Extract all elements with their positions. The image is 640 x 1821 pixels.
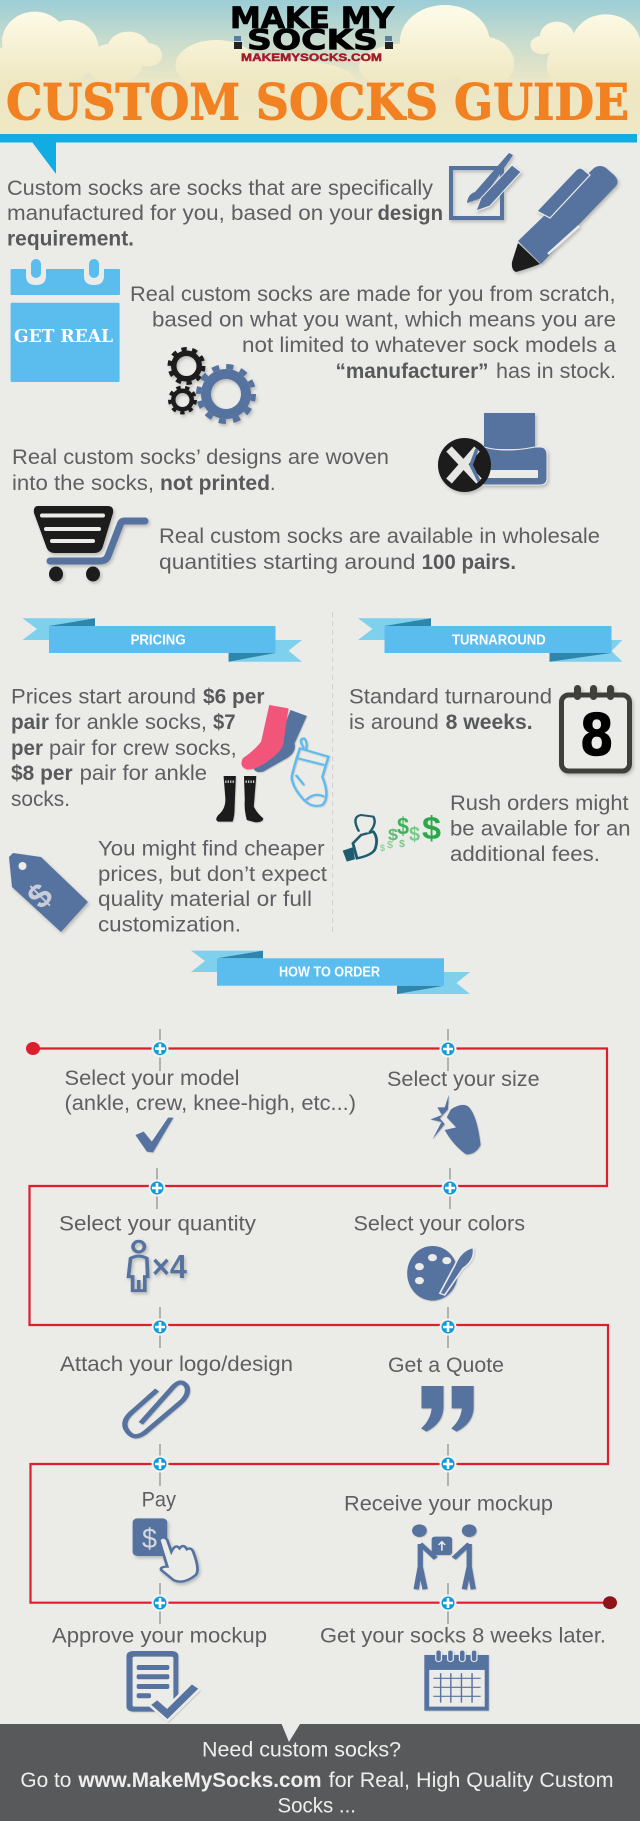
logo: Make My Socks: SOCKS bbox=[247, 23, 378, 56]
text: cheaper prices warning: quality material or full bbox=[98, 888, 312, 911]
header with sky and clouds bbox=[0, 0, 640, 135]
footer text: Need custom socks? bbox=[202, 1739, 401, 1762]
text: pricing details bbox=[11, 685, 264, 811]
text: custom socks definition: Custom socks are socks that are specifically bbox=[7, 177, 434, 200]
icon: document with check bbox=[126, 1651, 195, 1714]
step: select your model: (ankle, crew, knee-high, etc...) bbox=[64, 1092, 356, 1115]
text: standard turnaround bbox=[349, 685, 552, 734]
icon: price tag bbox=[9, 853, 88, 932]
icon: GET REAL calendar bbox=[11, 259, 120, 382]
footer text: Socks ... bbox=[278, 1795, 356, 1818]
icon: GET REAL calendar: GET REAL bbox=[14, 326, 113, 347]
footer text: for Real, High Quality Custom bbox=[329, 1769, 614, 1792]
icon: pay button with hand: $ bbox=[142, 1523, 157, 1554]
icon: money bag hand and dollars: $ bbox=[397, 813, 410, 840]
step: pay: Pay bbox=[142, 1489, 176, 1512]
icon: calendar with 8 bbox=[562, 685, 630, 771]
footer text: Go to bbox=[20, 1769, 71, 1792]
text: wholesale quantities: Real custom socks are available in wholesale bbox=[159, 525, 600, 548]
icon: paperclip bbox=[125, 1382, 187, 1436]
ribbon: how to order: HOW TO ORDER bbox=[279, 965, 380, 981]
logo: Make My Socks bbox=[230, 1, 395, 64]
icon: person times 4: ×4 bbox=[152, 1248, 188, 1285]
icon: money bag hand and dollars: $ bbox=[387, 840, 393, 851]
icon: pay button with hand bbox=[133, 1518, 197, 1582]
text: rush orders: Rush orders might bbox=[450, 792, 629, 815]
icon: price tag: $ bbox=[20, 876, 60, 916]
text: wholesale quantities: 100 pairs. bbox=[422, 551, 516, 574]
text: pricing details: $7 bbox=[213, 711, 236, 734]
flow: red path with step nodes bbox=[26, 1029, 617, 1624]
icon: money bag hand and dollars: $ bbox=[422, 810, 441, 846]
step: select your model: Select your model bbox=[64, 1067, 240, 1090]
text: real custom socks made from scratch: has in stock. bbox=[496, 360, 616, 383]
icon: money bag hand and dollars: $ bbox=[409, 824, 420, 846]
icon: socks bbox=[216, 705, 328, 822]
text: standard turnaround: is around bbox=[349, 711, 439, 734]
step: approve your mockup: Approve your mockup bbox=[52, 1625, 267, 1648]
text: pricing details: pair for crew socks, bbox=[49, 737, 237, 760]
ribbon: how to order bbox=[191, 951, 470, 994]
icon: hand with sparkle bbox=[430, 1095, 481, 1154]
footer text: www.MakeMySocks.com bbox=[77, 1769, 322, 1792]
ribbon: turnaround: TURNAROUND bbox=[452, 632, 546, 648]
text: designs woven: Real custom socks’ designs are woven bbox=[12, 446, 389, 469]
text: cheaper prices warning: customization. bbox=[98, 914, 241, 937]
ribbon: pricing: PRICING bbox=[131, 632, 186, 648]
step: attach logo: Attach your logo/design bbox=[60, 1353, 293, 1376]
text: custom socks definition: requirement. bbox=[7, 228, 134, 250]
text: designs woven: not printed bbox=[160, 472, 270, 495]
text: real custom socks made from scratch bbox=[130, 283, 616, 383]
footer panel bbox=[0, 1724, 640, 1821]
text: pricing details: per bbox=[11, 737, 43, 760]
icon: calendar with 8: 8 bbox=[580, 701, 614, 769]
text: pricing details: Prices start around bbox=[11, 685, 196, 708]
text: cheaper prices warning: You might find cheaper bbox=[98, 838, 324, 861]
text: pricing details: $8 per bbox=[11, 762, 73, 785]
icon: money bag hand and dollars bbox=[343, 810, 441, 862]
text: designs woven: . bbox=[270, 472, 276, 495]
icon: design checkbox with brush and pen bbox=[451, 153, 521, 218]
icon: money bag hand and dollars: $ bbox=[388, 827, 398, 844]
text: wholesale quantities: quantities starting around bbox=[159, 551, 416, 574]
text: cheaper prices warning bbox=[98, 838, 327, 937]
icon: crossed out printer bbox=[438, 413, 547, 492]
text: real custom socks made from scratch: based on what you want, which means you are bbox=[152, 308, 616, 332]
text: custom socks definition: design bbox=[378, 202, 443, 225]
text: standard turnaround: Standard turnaround bbox=[349, 685, 552, 708]
icon: large pen bbox=[512, 166, 618, 272]
text: designs woven: into the socks, bbox=[12, 472, 154, 495]
icon: money bag hand and dollars: $ bbox=[380, 843, 385, 853]
text: custom socks definition bbox=[7, 177, 443, 250]
step: receive your mockup: Receive your mockup bbox=[344, 1493, 553, 1516]
blue header bar with pointer bbox=[0, 134, 637, 174]
icon: person times 4 bbox=[129, 1241, 188, 1291]
footer text bbox=[20, 1739, 614, 1818]
text: pricing details: socks. bbox=[11, 788, 70, 811]
icon: check mark bbox=[135, 1118, 173, 1152]
text: designs woven bbox=[12, 446, 389, 495]
text: real custom socks made from scratch: not limited to whatever sock models a bbox=[242, 334, 616, 357]
text: pricing details: $6 per bbox=[203, 685, 264, 708]
step: select your quantity: Select your quantity bbox=[59, 1213, 257, 1236]
step: select your colors: Select your colors bbox=[354, 1213, 525, 1236]
text: custom socks definition: manufactured for you, based on your bbox=[7, 202, 373, 225]
ribbon: pricing bbox=[22, 618, 302, 662]
text: rush orders: additional fees. bbox=[450, 843, 600, 866]
text: rush orders: be available for an bbox=[450, 818, 631, 841]
logo: Make My Socks: MAKE MY bbox=[230, 1, 395, 35]
icon: paint palette bbox=[407, 1246, 474, 1301]
step: select your size: Select your size bbox=[387, 1068, 540, 1091]
text: standard turnaround: 8 weeks. bbox=[446, 711, 533, 734]
text: pricing details: for ankle socks, bbox=[55, 711, 207, 734]
icon: two people exchanging a box bbox=[412, 1524, 477, 1589]
icon: shopping cart bbox=[34, 506, 145, 582]
text: pricing details: pair bbox=[11, 711, 49, 734]
icon: delivery calendar bbox=[424, 1650, 489, 1711]
step: get a quote: Get a Quote bbox=[388, 1354, 504, 1377]
icon: quotation marks bbox=[421, 1386, 474, 1432]
text: pricing details: pair for ankle bbox=[80, 762, 207, 785]
text: wholesale quantities bbox=[159, 525, 600, 574]
text: real custom socks made from scratch: “manufacturer” bbox=[336, 360, 488, 383]
icon: money bag hand and dollars: $ bbox=[399, 839, 405, 850]
step: get your socks: Get your socks 8 weeks later. bbox=[320, 1625, 606, 1648]
text: real custom socks made from scratch: Real custom socks are made for you from scratch, bbox=[130, 283, 616, 306]
text: cheaper prices warning: prices, but don’t expect bbox=[98, 863, 327, 886]
text: rush orders bbox=[450, 792, 631, 866]
icon: gears bbox=[170, 349, 254, 422]
step: select your model bbox=[64, 1067, 356, 1115]
logo: Make My Socks: MAKEMYSOCKS.COM bbox=[241, 52, 382, 64]
ribbon: turnaround bbox=[358, 618, 622, 662]
